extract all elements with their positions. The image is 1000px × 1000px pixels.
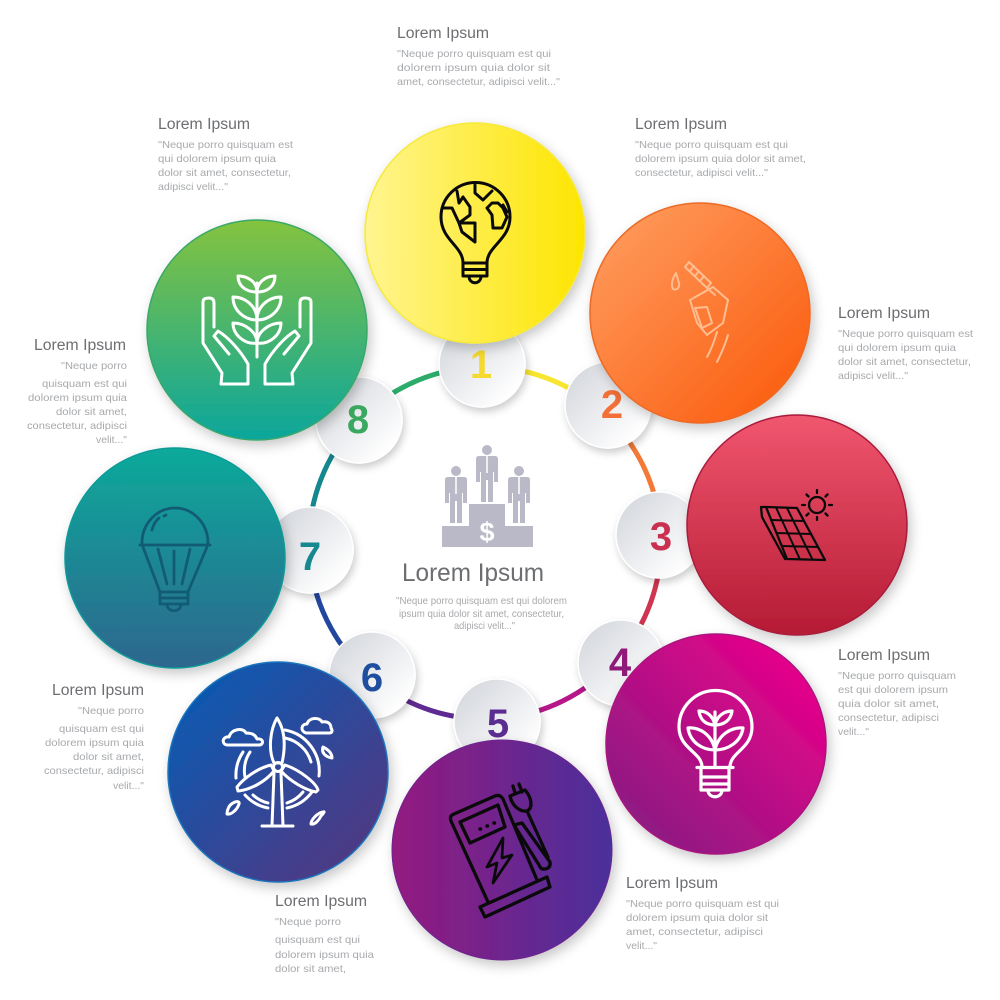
number badge 8: 8 [347,398,369,442]
text block 4: "Neque porro quisquam [838,670,956,682]
number badge 1 [439,321,525,407]
circle 3: red [687,415,907,635]
text block 1: Lorem Ipsum [397,25,489,42]
text block 8 top: "Neque porro quisquam est [158,139,293,151]
text block 8 left: dolorem ipsum quia [28,392,127,404]
text block 7: quisquam est qui [59,723,144,735]
text block 4: quia dolor sit amet, [838,698,939,710]
centre text block: ipsum quia dolor sit amet, consectetur, [399,608,564,620]
text block 8 left: "Neque porro [61,360,127,372]
text block 7: dolorem ipsum quia [45,737,144,749]
text block 5: Lorem Ipsum [626,875,718,892]
number badge 5: 5 [487,702,509,746]
text block 8 top: adipisci velit..." [158,181,228,193]
number badge 2 [565,362,651,448]
text block 3: qui dolorem ipsum quia [838,342,956,354]
text block 6 [275,893,374,975]
icon: solar panel and sun [761,490,832,560]
text block 8 top: Lorem Ipsum [158,116,250,133]
icon: wind turbine [223,718,332,826]
text block 3 [838,305,973,382]
text block 4: consectetur, adipisci [838,712,939,724]
number badge 4: 4 [609,641,632,685]
number badge 3: 3 [650,515,672,559]
text block 3: Lorem Ipsum [838,305,930,322]
text block 7: Lorem Ipsum [52,682,144,699]
circle 1: yellow [365,123,585,343]
number badge 1: 1 [470,343,492,387]
icon: EV charging station [450,784,550,917]
text block 1: "Neque porro quisquam est qui [397,48,551,60]
text block 8 left: quisquam est qui [42,378,127,390]
icon: people on podium with dollar sign [442,445,533,547]
icon: plant in light bulb [679,690,752,797]
centre text block: Lorem Ipsum [402,559,544,587]
text block 8 top: qui dolorem ipsum quia [158,153,276,165]
text block 6: dolor sit amet, [275,963,346,975]
text block 2: Lorem Ipsum [635,116,727,133]
text block 2: dolorem ipsum quia dolor sit amet, [635,153,806,165]
text block 3: adipisci velit..." [838,370,908,382]
text block 5: velit..." [626,940,657,952]
text block 8 left: dolor sit amet, [56,406,127,418]
number badge 7 [267,507,353,593]
text block 5: dolorem ipsum quia dolor sit [626,912,768,924]
text block 7: velit..." [113,780,144,792]
text block 1 [397,25,560,88]
centre text block: adipisci velit..." [454,620,515,632]
text block 3: dolor sit amet, consectetur, [838,356,971,368]
text block 7: dolor sit amet, [73,751,144,763]
text block 2: consectetur, adipisci velit..." [635,167,768,179]
text block 3: "Neque porro quisquam est [838,328,973,340]
icon: LED bulb [140,508,210,611]
icon: hands holding plant [203,276,311,384]
text block 8 top: dolor sit amet, consectetur, [158,167,291,179]
ring of coloured arcs [309,367,661,719]
text block 7: consectetur, adipisci [44,765,144,777]
circle 7: teal [65,448,285,668]
text block 2 [635,116,806,179]
text block 2: "Neque porro quisquam est qui [635,139,788,151]
text block 8 top [158,116,293,193]
text block 7: "Neque porro [78,705,144,717]
circle 8: green [147,220,367,440]
circle 5: purple [392,740,612,960]
text block 8 left: Lorem Ipsum [34,337,126,354]
icon: globe light bulb [441,182,510,283]
text block 5: amet, consectetur, adipisci [626,926,763,938]
text block 6: Lorem Ipsum [275,893,367,910]
circle 4: magenta [606,634,826,854]
text block 6: dolorem ipsum quia [275,949,374,961]
text block 6: "Neque porro [275,916,341,928]
number badge 3 [616,492,702,578]
centre text block: "Neque porro quisquam est qui dolorem [396,595,567,607]
number badge 6: 6 [361,656,383,700]
icon: people on podium with dollar sign: $ [479,517,495,547]
icon: fuel nozzle [672,262,728,362]
number badge 5 [454,679,540,765]
text block 6: quisquam est qui [275,934,360,946]
number badge 7: 7 [299,535,321,579]
text block 8 left [27,337,127,446]
text block 8 left: consectetur, adipisci [27,420,127,432]
number badge 8 [316,377,402,463]
text block 5 [626,875,779,952]
text block 8 left: velit..." [96,434,127,446]
centre text block [396,559,567,632]
number badge 4 [578,620,664,706]
text block 4 [838,647,956,738]
text block 5: "Neque porro quisquam est qui [626,898,779,910]
circle 2: orange [590,203,810,423]
number badge 6 [329,632,415,718]
number badge 2: 2 [601,383,623,427]
text block 4: est qui dolorem ipsum [838,684,948,696]
text block 1: dolorem ipsum quia dolor sit [397,62,550,74]
circle 6: blue [168,662,388,882]
text block 1: amet, consectetur, adipisci velit..." [397,76,560,88]
text block 7 [44,682,144,792]
text block 4: velit..." [838,726,869,738]
text block 4: Lorem Ipsum [838,647,930,664]
